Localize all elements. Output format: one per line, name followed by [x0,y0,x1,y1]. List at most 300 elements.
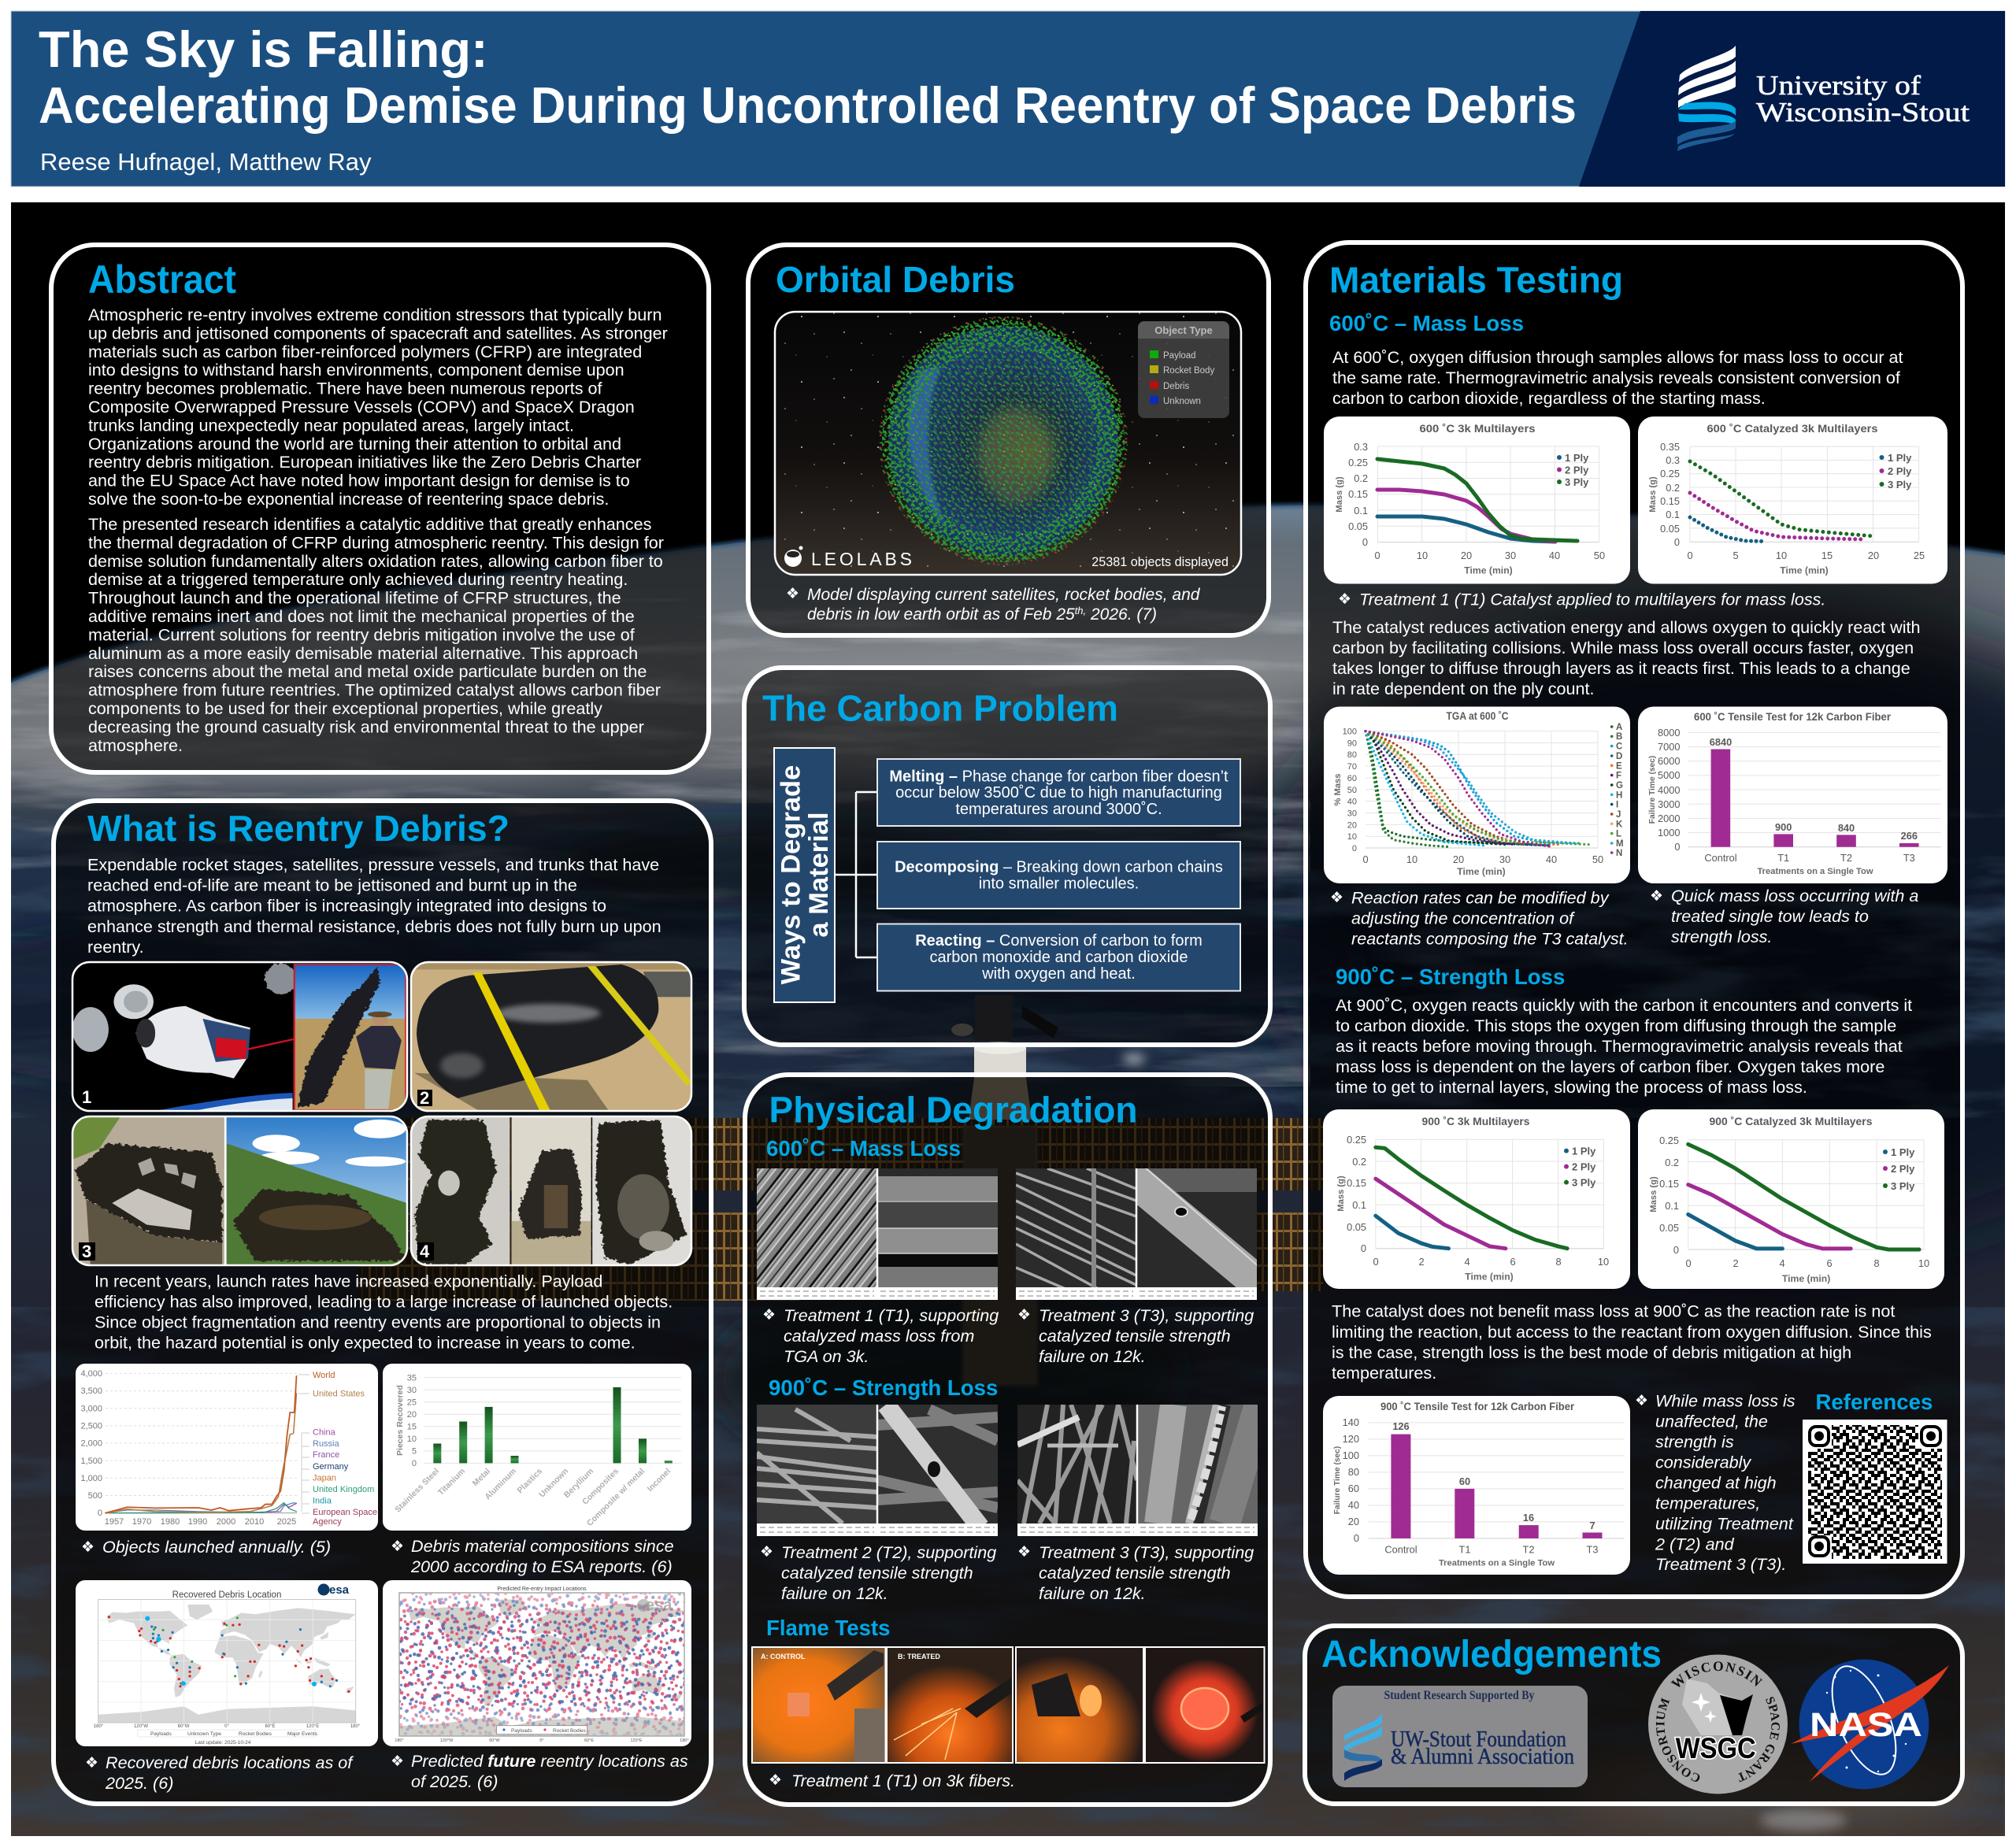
chart: 900C tensile test: 7 [1589,1520,1595,1531]
legend: object type: Payload [1163,351,1196,361]
chart: 600C tensile test: T1 [1777,852,1789,864]
chart: debris material compositions: Pieces Recovered [395,1385,405,1456]
caption: predicted reentry [391,1751,688,1791]
map: recovered debris locations: Unknown Type [187,1731,221,1737]
caption: reaction rates [1330,888,1629,948]
chart: objects launched annually: 4,000 [80,1369,102,1379]
chart: 600C catalyzed 3k multilayers: 0.3 [1666,454,1680,466]
caption: T2 tensile: ❖ [760,1543,773,1560]
chart: 900C catalyzed 3k multilayers: 8 [1873,1257,1880,1269]
chart: debris material compositions: 20 [407,1410,417,1420]
chart: 900C tensile test: 80 [1348,1466,1359,1478]
chart: TGA at 600C: L [1616,830,1621,839]
caption: debris materials: Debris material compositions since [411,1536,674,1556]
title: Accelerating Demise During Uncontrolled Reentry of Space Debris [39,76,1577,134]
chart: 600C 3k multilayers: 0 [1362,536,1368,548]
map: predicted future reentry locations [383,1580,691,1746]
logo: NASA: NASA [1810,1706,1922,1744]
text: 900C intro: to carbon dioxide. This stops the oxygen from diffusing through the sample [1336,1016,1896,1035]
logo: WSGC: WSGC [1676,1732,1756,1764]
chart: 600C catalyzed 3k multilayers: 600 ˚C Catalyzed 3k Multilayers [1707,422,1878,435]
chart: 900C catalyzed 3k multilayers: 0 [1685,1257,1692,1269]
label: 3 [79,1242,95,1261]
text: abstract paragraph 2: material. Current solutions for reentry debris mitigation involve the use of [88,624,636,644]
chart: objects launched annually [76,1364,378,1531]
chart: 900C catalyzed 3k multilayers: 0.15 [1659,1178,1679,1190]
caption: T1 mass loss: catalyzed mass loss from [784,1326,974,1346]
chart: 900C 3k multilayers: Mass (g) [1336,1175,1346,1212]
chart: 600C catalyzed 3k multilayers: 0 [1687,550,1693,561]
chart: 600C catalyzed 3k multilayers: Time (min) [1780,565,1829,576]
map: recovered debris locations: 60°W [178,1724,190,1729]
panel: materials testing [1306,242,1962,1597]
chart: TGA at 600C: F [1616,772,1621,781]
chart: TGA at 600C: H [1616,790,1622,800]
caption: T2 tensile: failure on 12k. [781,1583,888,1603]
label: 3: 3 [82,1242,91,1261]
chart: 600C tensile test: 7000 [1658,741,1681,753]
logo: UW-Stout Foundation [1332,1686,1588,1787]
text: 900C intro: At 900˚C, oxygen reacts quickly with the carbon it encounters and converts it [1336,995,1912,1015]
text: catalyst at 900C: is the case, strength loss is the best mode of debris mitigation at high [1332,1342,1851,1362]
caption: orbital model [786,585,1201,624]
chart: 600C 3k multilayers: 3 Ply [1565,476,1589,488]
text: catalyst at 900C: The catalyst does not benefit mass loss at 900˚C as the reaction rate is not [1332,1301,1895,1321]
caption: recovered debris: Recovered debris locations as of [106,1753,354,1772]
chart: 600C 3k multilayers: 50 [1594,550,1605,561]
text: reentry intro: reentry. [87,937,144,957]
chart: 600C 3k multilayers: 600 ˚C 3k Multilayers [1419,422,1536,435]
caption: flame tests: ❖ [769,1772,782,1789]
chart: objects launched annually: 1,000 [80,1474,102,1483]
chart: 900C tensile test: Control [1384,1544,1418,1556]
chart: 600C 3k multilayers: 40 [1549,550,1560,561]
text: launch rates paragraph: efficiency has also improved, leading to a large increase of launched objects. [94,1291,673,1312]
SEM image pair: treatment 2 [757,1405,998,1536]
chart: 600C 3k multilayers: 2 Ply [1565,465,1589,476]
image: LeoLabs globe model [775,312,1241,575]
caption: predicted reentry: future reentry locations as [487,1751,688,1771]
chart: 900C tensile test: 100 [1343,1449,1359,1461]
chart: 900C catalyzed 3k multilayers: 0.1 [1665,1200,1679,1212]
chart: TGA at 600C: 20 [1453,853,1464,865]
chart: 900C catalyzed 3k multilayers: 1 Ply [1891,1146,1915,1158]
box: ways to degrade a material: Ways to Degrade [776,765,806,984]
chart: 900C 3k multilayers: 1 Ply [1572,1146,1596,1157]
chart: objects launched annually: 1957 [105,1517,124,1527]
map: recovered debris locations: 180° [350,1724,361,1729]
caption: strength changes at high temperature: strength is [1655,1431,1734,1452]
caption: debris materials [391,1536,674,1576]
chart: 600C tensile test: 900 [1775,821,1792,833]
chart: 900C tensile test: Treatments on a Single Tow [1439,1559,1555,1568]
chart: TGA at 600C: G [1616,781,1623,790]
chart: objects launched annually: Agency [313,1517,342,1527]
chart: 600C 3k multilayers: 1 Ply [1565,452,1589,464]
text: 900C intro: mass loss is dependent on the layers of carbon fiber. Oxygen takes more [1336,1057,1884,1076]
caption: T1 mass loss: ❖ [762,1306,776,1324]
panel: physical degradation [745,1075,1270,1805]
box: reacting: Reacting – Conversion of carbon to form [915,932,1203,950]
chart: 600C 3k multilayers: 30 [1505,550,1516,561]
map: recovered debris locations: 0° [224,1724,229,1729]
chart: 600C tensile test: T2 [1840,852,1852,864]
chart: TGA at 600C: 50 [1592,853,1603,865]
chart: 600C 3k multilayers: 0.05 [1348,520,1368,532]
logo: WSGC: WISCONSIN [1671,1661,1762,1687]
chart: 600C catalyzed 3k multilayers: 0.35 [1660,441,1680,453]
heading: materials testing: Materials Testing [1329,260,1623,301]
photo 2: pressure vessel [411,962,692,1111]
chart: 900C 3k multilayers: 0.2 [1352,1156,1366,1168]
caption: orbital model: 2026. (7) [1086,605,1157,624]
text: 600C intro: At 600˚C, oxygen diffusion through samples allows for mass loss to occur at [1332,347,1903,367]
chart: 900C catalyzed 3k multilayers: 3 Ply [1891,1180,1915,1192]
panel: abstract [51,245,709,772]
map: recovered debris locations: Major Events [287,1731,318,1737]
chart: debris material compositions: 0 [412,1459,417,1468]
logo: university wordmark: Wisconsin-Stout [1756,97,1970,128]
chart: TGA at 600C: I [1616,801,1618,810]
chart: 600C tensile test: 5000 [1658,769,1681,781]
legend: object type: Rocket Body [1163,366,1214,376]
caption: T1 mass loss [762,1305,999,1366]
heading: acknowledgements: Acknowledgements [1321,1634,1662,1675]
box: decomposing: into smaller molecules. [979,876,1139,893]
chart: 900C catalyzed 3k multilayers: 4 [1779,1257,1785,1269]
text: launch rates paragraph: In recent years, launch rates have increased exponentially. Payload [94,1271,602,1291]
chart: 600C tensile test: 3000 [1658,798,1681,810]
chart: 600C tensile test: Control [1704,852,1737,864]
title: The Sky is Falling: [39,20,488,78]
chart: 600C tensile test: Failure Time (sec) [1648,756,1657,824]
chart: objects launched annually: 2000 [217,1517,235,1527]
chart: 900C tensile test: T1 [1459,1544,1470,1556]
text: abstract paragraph 1: Composite Overwrapped Pressure Vessels (COPV) and SpaceX Dragon [88,397,635,416]
text: abstract paragraph 1: Atmospheric re-entry involves extreme condition stressors that typically burn [88,305,662,324]
chart: debris material compositions: 30 [407,1386,417,1395]
caption: T1 catalyst: ❖ [1338,591,1351,608]
chart: 600C 3k multilayers: 0 [1374,550,1380,561]
caption: objects launched: Objects launched annually. (5) [102,1537,331,1557]
QR code: references [1803,1420,1947,1564]
caption: recovered debris [85,1753,354,1793]
map: predicted future reentry locations: 180° [680,1738,689,1743]
chart: TGA at 600C: 0 [1362,853,1369,865]
chart: 900C 3k multilayers [1323,1109,1630,1289]
map: recovered debris locations: 120°W [134,1724,148,1729]
box: melting: temperatures around 3000˚C. [955,801,1162,818]
chart: 900C 3k multilayers: 8 [1555,1256,1562,1268]
chart: 900C 3k multilayers: 0.25 [1347,1134,1366,1146]
chart: 900C tensile test: 20 [1348,1516,1359,1527]
panel: orbital debris [748,245,1269,635]
text: 900C intro: time to get to internal layers, slowing the process of mass loss. [1336,1077,1807,1097]
chart: objects launched annually: 2025 [277,1517,296,1527]
subheading: 600C mass loss: 600˚C – Mass Loss [766,1136,961,1161]
map: recovered debris locations: 120°E [306,1724,319,1729]
text: catalyst explanation: carbon by facilitating collisions. While mass loss overall occurs faster, oxygen [1332,638,1914,657]
chart: debris material compositions: 25 [407,1398,417,1408]
text: reentry intro: reached end-of-life are meant to be jettisoned and burnt up in the [87,876,577,895]
chart: 600C tensile test: 0 [1674,841,1681,853]
chart: 900C 3k multilayers: 2 Ply [1572,1161,1596,1173]
caption: T3 tensile at 600C: Treatment 3 (T3), supporting [1039,1305,1254,1325]
chart: 900C catalyzed 3k multilayers: 900 ˚C Catalyzed 3k Multilayers [1709,1115,1873,1127]
chart: 900C tensile test: 60 [1459,1475,1470,1487]
chart: TGA at 600C: % Mass [1333,773,1343,806]
logo: university wordmark [1756,70,1970,128]
chart: 900C catalyzed 3k multilayers: Mass (g) [1649,1176,1658,1212]
chart: TGA at 600C: 60 [1347,774,1357,783]
box: decomposing: Decomposing – Breaking down carbon chains [895,858,1223,876]
text: reentry intro: atmosphere. As carbon fiber is increasingly integrated into designs to [87,896,606,916]
chart: 600C tensile test: 840 [1838,822,1855,834]
caption: T3 tensile at 900C: failure on 12k. [1039,1583,1146,1603]
caption: strength changes at high temperature: utilizing Treatment [1655,1513,1794,1534]
logo: UW-Stout swirl [1677,46,1736,151]
chart: 900C 3k multilayers: 0 [1373,1256,1379,1268]
label: 4: 4 [420,1242,430,1261]
text: abstract paragraph 2: decreasing the ground casualty risk and environmental threat to the upper [88,716,644,736]
caption: T2 tensile: catalyzed tensile strength [781,1563,973,1583]
chart: 600C tensile test: 4000 [1658,784,1681,796]
caption: orbital model: Model displaying current satellites, rocket bodies, and [807,586,1201,604]
caption: objects launched: ❖ [81,1538,94,1556]
logo: LeoLabs [784,546,912,569]
chart: 900C tensile test: 126 [1392,1420,1410,1432]
caption: reaction rates: Reaction rates can be modified by [1351,888,1610,907]
caption: debris materials: 2000 according to ESA reports. (6) [410,1557,673,1576]
chart: TGA at 600C: A [1616,723,1622,732]
caption: strength changes at high temperature: While mass loss is [1655,1390,1796,1411]
caption: strength changes at high temperature: considerably [1655,1452,1751,1472]
chart: 900C 3k multilayers: 2 [1418,1256,1425,1268]
chart: 900C 3k multilayers: 900 ˚C 3k Multilayers [1422,1115,1530,1127]
photo 4: frayed trunk fragments [411,1116,691,1265]
chart: TGA at 600C: 20 [1347,820,1357,830]
caption: reaction rates: ❖ [1330,889,1343,906]
chart: TGA at 600C: N [1616,849,1622,858]
photo 1: Dragon trunk debris [72,962,407,1111]
chart: TGA at 600C: 70 [1347,762,1357,772]
logo: university wordmark: University of [1756,70,1921,101]
legend: object type: Object Type [1154,324,1213,336]
chart: 900C catalyzed 3k multilayers: 2 [1732,1257,1739,1269]
text: catalyst explanation: takes longer to diffuse through layers as it reacts first. This leads to a change [1332,658,1910,678]
chart: debris material compositions: 10 [407,1435,417,1444]
map: recovered debris locations: Recovered Debris Location [172,1590,281,1600]
chart: 600C 3k multilayers [1324,416,1630,584]
panel: acknowledgements [1303,1623,1965,1806]
image: flame test side view [1016,1647,1143,1763]
logo: UW-Stout Foundation: UW-Stout Foundation [1391,1727,1566,1752]
chart: 600C catalyzed 3k multilayers: 1 Ply [1888,452,1912,464]
photo 3: debris on ground [72,1116,407,1265]
chart: 600C catalyzed 3k multilayers: 0.2 [1666,482,1680,494]
chart: 900C 3k multilayers: 0 [1361,1242,1366,1254]
chart: 600C tensile test: 6000 [1658,755,1681,767]
chart: 900C tensile test: T3 [1587,1544,1598,1556]
chart: TGA at 600C: E [1616,761,1622,771]
chart: objects launched annually: 2010 [245,1517,264,1527]
chart: 600C 3k multilayers: 0.25 [1348,457,1368,468]
chart: debris material compositions: Titanium [436,1467,467,1498]
chart: 900C catalyzed 3k multilayers: 0 [1673,1244,1679,1256]
caption: strength changes at high temperature: unaffected, the [1655,1411,1768,1431]
map: recovered debris locations: 180° [94,1724,104,1729]
map: predicted future reentry locations: 120°W [440,1738,454,1743]
chart: objects launched annually: 1970 [132,1517,151,1527]
chart: 900C 3k multilayers: 6 [1510,1256,1516,1268]
heading: abstract: Abstract [88,257,236,302]
chart: debris material compositions: Composites [580,1467,621,1507]
chart: 900C tensile test: 16 [1523,1512,1534,1523]
chart: 900C catalyzed 3k multilayers: 6 [1826,1257,1833,1269]
map: recovered debris locations [76,1580,378,1746]
subheading: 900C strength loss: 900˚C – Strength Loss [769,1375,998,1400]
caption: reaction rates: adjusting the concentration of [1351,909,1575,927]
chart: objects launched annually: 500 [88,1491,102,1501]
chart: 900C tensile test: 0 [1354,1532,1359,1544]
map: recovered debris locations: Payloads [150,1731,172,1737]
chart: 900C tensile test: Failure Time (sec) [1333,1446,1342,1514]
chart: 900C 3k multilayers: 4 [1464,1256,1470,1268]
chart: debris material compositions: Metal [471,1467,492,1488]
chart: debris material compositions: Inconel [646,1467,673,1494]
chart: 600C tensile test: 8000 [1658,727,1681,739]
text: abstract paragraph 1: and the EU Space Act have noted how important design for demise is to [88,471,630,491]
text: catalyst at 900C: limiting the reaction, but access to the reactant from oxygen diffusion. Since this [1332,1322,1932,1342]
caption: T1 catalyst: Treatment 1 (T1) Catalyst applied to multilayers for mass loss. [1359,590,1825,609]
logo: WSGC: SPACE GRANT [1738,1697,1780,1783]
chart: 900C catalyzed 3k multilayers: 10 [1918,1257,1929,1269]
map: predicted future reentry locations: 180° [395,1738,404,1743]
caption: strength changes at high temperature: temperatures, [1655,1493,1760,1513]
box: reacting [877,924,1240,990]
chart: 600C 3k multilayers: 0.15 [1348,488,1368,500]
caption: strength loss: Quick mass loss occurring with a [1671,886,1918,905]
caption: reaction rates: reactants composing the T3 catalyst. [1351,929,1629,948]
caption: strength changes at high temperature [1635,1390,1796,1574]
chart: 900C tensile test: 60 [1348,1483,1359,1494]
caption: strength changes at high temperature: ❖ [1635,1392,1648,1409]
chart: TGA at 600C: M [1616,839,1624,849]
text: abstract paragraph 2: Throughout launch and the operational lifetime of CFRP structures, the [88,588,621,608]
chart: objects launched annually: Russia [313,1439,340,1449]
chart: TGA at 600C: 100 [1343,727,1357,737]
label: object count: 25381 objects displayed [1091,555,1228,569]
chart: 600C 3k multilayers: 0.3 [1354,441,1368,453]
chart: objects launched annually: 3,000 [80,1405,102,1414]
text: abstract paragraph 1: trunks landing unexpectedly near populated areas, largely intact. [88,415,574,435]
text: reentry intro: Expendable rocket stages, satellites, pressure vessels, and trunks that have [87,855,659,874]
chart: 600C 3k multilayers: Mass (g) [1335,476,1344,513]
chart: 900C catalyzed 3k multilayers: 2 Ply [1891,1163,1915,1175]
caption: orbital model: debris in low earth orbit as of Feb 25 [807,605,1075,624]
box: reacting: with oxygen and heat. [981,965,1136,983]
text: catalyst at 900C: temperatures. [1332,1363,1436,1383]
caption: predicted reentry: Predicted [411,1751,487,1771]
image: flame test A control [752,1647,885,1763]
chart: 600C tensile test: 1000 [1658,827,1681,839]
chart: 600C tensile test: 2000 [1658,813,1681,824]
chart: TGA at 600C: 0 [1352,844,1357,853]
chart: debris material compositions: Aluminum [483,1467,518,1501]
map: recovered debris locations: 60°E [265,1724,276,1729]
chart: objects launched annually: European Space [313,1508,377,1517]
chart: debris material compositions [383,1364,691,1531]
map: predicted future reentry locations: Payloads [511,1728,532,1734]
map: predicted future reentry locations: 60°W [489,1738,501,1743]
chart: 900C 3k multilayers: 0.1 [1352,1199,1366,1211]
chart: objects launched annually: 0 [98,1509,102,1518]
box: decomposing [877,842,1240,909]
caption: predicted reentry: of 2025. (6) [411,1772,498,1791]
chart: 600C catalyzed 3k multilayers: 0 [1674,536,1680,548]
chart: objects launched annually: 3,500 [80,1386,102,1396]
heading: physical degradation: Physical Degradation [769,1090,1137,1131]
caption: strength loss: treated single tow leads to [1671,906,1869,926]
chart: 600C 3k multilayers: 10 [1417,550,1428,561]
text: 600C intro: carbon to carbon dioxide, regardless of the starting mass. [1332,388,1766,408]
subheading: flame tests: Flame Tests [766,1616,890,1640]
box: melting: Melting – Phase change for carbon fiber doesn’t [889,768,1228,786]
chart: objects launched annually: India [313,1496,332,1505]
caption: T2 tensile [760,1542,996,1603]
map: recovered debris locations: Rocket Bodies [239,1731,272,1737]
chart: objects launched annually: 1980 [161,1517,180,1527]
chart: 600C catalyzed 3k multilayers: 25 [1914,550,1925,561]
space station solar arrays [358,995,1323,1386]
chart: debris material compositions: Stainless Steel [393,1467,441,1515]
chart: debris material compositions: 35 [407,1373,417,1383]
header banner [11,11,2005,187]
text: reentry intro: enhance strength and thermal resistance, debris does not fully burn up upon [87,916,662,936]
box: ways to degrade a material [774,748,835,1002]
chart: 600C catalyzed 3k multilayers: 20 [1868,550,1879,561]
logo: WSGC [1648,1655,1788,1794]
text: abstract paragraph 2: raises concerns about the metal and metal oxide particulate burden on the [88,661,647,681]
logo: NASA [1791,1657,1949,1789]
heading: reentry debris: What is Reentry Debris? [87,808,510,849]
chart: 900C 3k multilayers: 3 Ply [1572,1177,1596,1189]
chart: TGA at 600C: 40 [1347,797,1357,806]
chart: 600C tensile test: 600 ˚C Tensile Test for 12k Carbon Fiber [1694,710,1892,723]
caption: T2 tensile: Treatment 2 (T2), supporting [781,1542,996,1562]
legend: object type [1150,324,1214,406]
text: abstract paragraph 2: demise solution fundamentally alters oxidation rates, allowing carbon fiber to [88,551,663,571]
chart: 600C catalyzed 3k multilayers: 3 Ply [1888,479,1912,491]
caption: strength changes at high temperature: 2 (T2) and [1655,1534,1735,1554]
caption: T3 tensile at 600C [1017,1305,1254,1366]
logo: UW-Stout Foundation: & Alumni Association [1391,1744,1574,1769]
chart: 600C tensile test: T3 [1903,852,1915,864]
caption: orbital model: ❖ [786,585,799,602]
chart: objects launched annually: China [313,1428,336,1438]
text: abstract paragraph 1: solve the soon-to-be exponential increase of reentering space debris. [88,489,609,509]
label: 1: 1 [82,1087,91,1107]
legend: object type: Unknown [1163,397,1201,406]
caption: T3 tensile at 600C: catalyzed tensile strength [1039,1326,1231,1346]
caption: predicted reentry: ❖ [391,1753,404,1770]
chart: objects launched annually: France [313,1450,339,1460]
chart: TGA at 600C: C [1616,742,1622,752]
text: abstract paragraph 2: aluminum as a more easily demisable material alternative. This approach [88,643,638,663]
chart: objects launched annually: 1,500 [80,1457,102,1466]
chart: 600C 3k multilayers: 20 [1461,550,1472,561]
chart: TGA at 600C: J [1616,810,1621,820]
